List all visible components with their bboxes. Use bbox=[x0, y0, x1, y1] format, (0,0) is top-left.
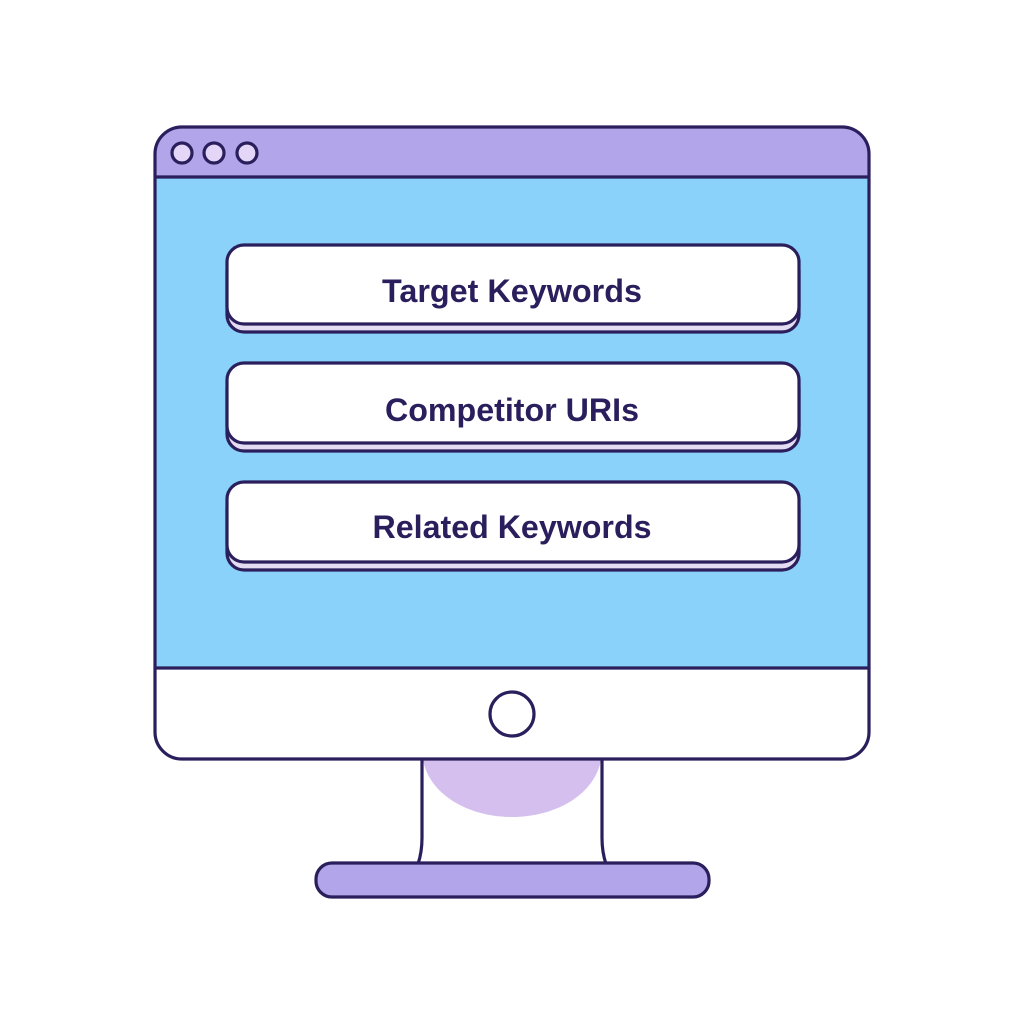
screen bbox=[155, 177, 869, 668]
monitor stand bbox=[418, 759, 606, 864]
card: Target Keywords bbox=[227, 245, 799, 332]
label: Related Keywords bbox=[372, 509, 652, 545]
card: Related Keywords bbox=[227, 482, 799, 570]
stand base bbox=[316, 863, 709, 897]
window control dots bbox=[172, 143, 257, 163]
stand neck shading bbox=[423, 760, 601, 817]
monitor body bbox=[155, 127, 869, 759]
label: Competitor URIs bbox=[385, 392, 639, 428]
label: Target Keywords bbox=[382, 273, 642, 309]
browser title bar bbox=[155, 127, 869, 177]
monitor outline bbox=[155, 127, 869, 759]
card: Competitor URIs bbox=[227, 363, 799, 451]
power button bbox=[490, 692, 534, 736]
